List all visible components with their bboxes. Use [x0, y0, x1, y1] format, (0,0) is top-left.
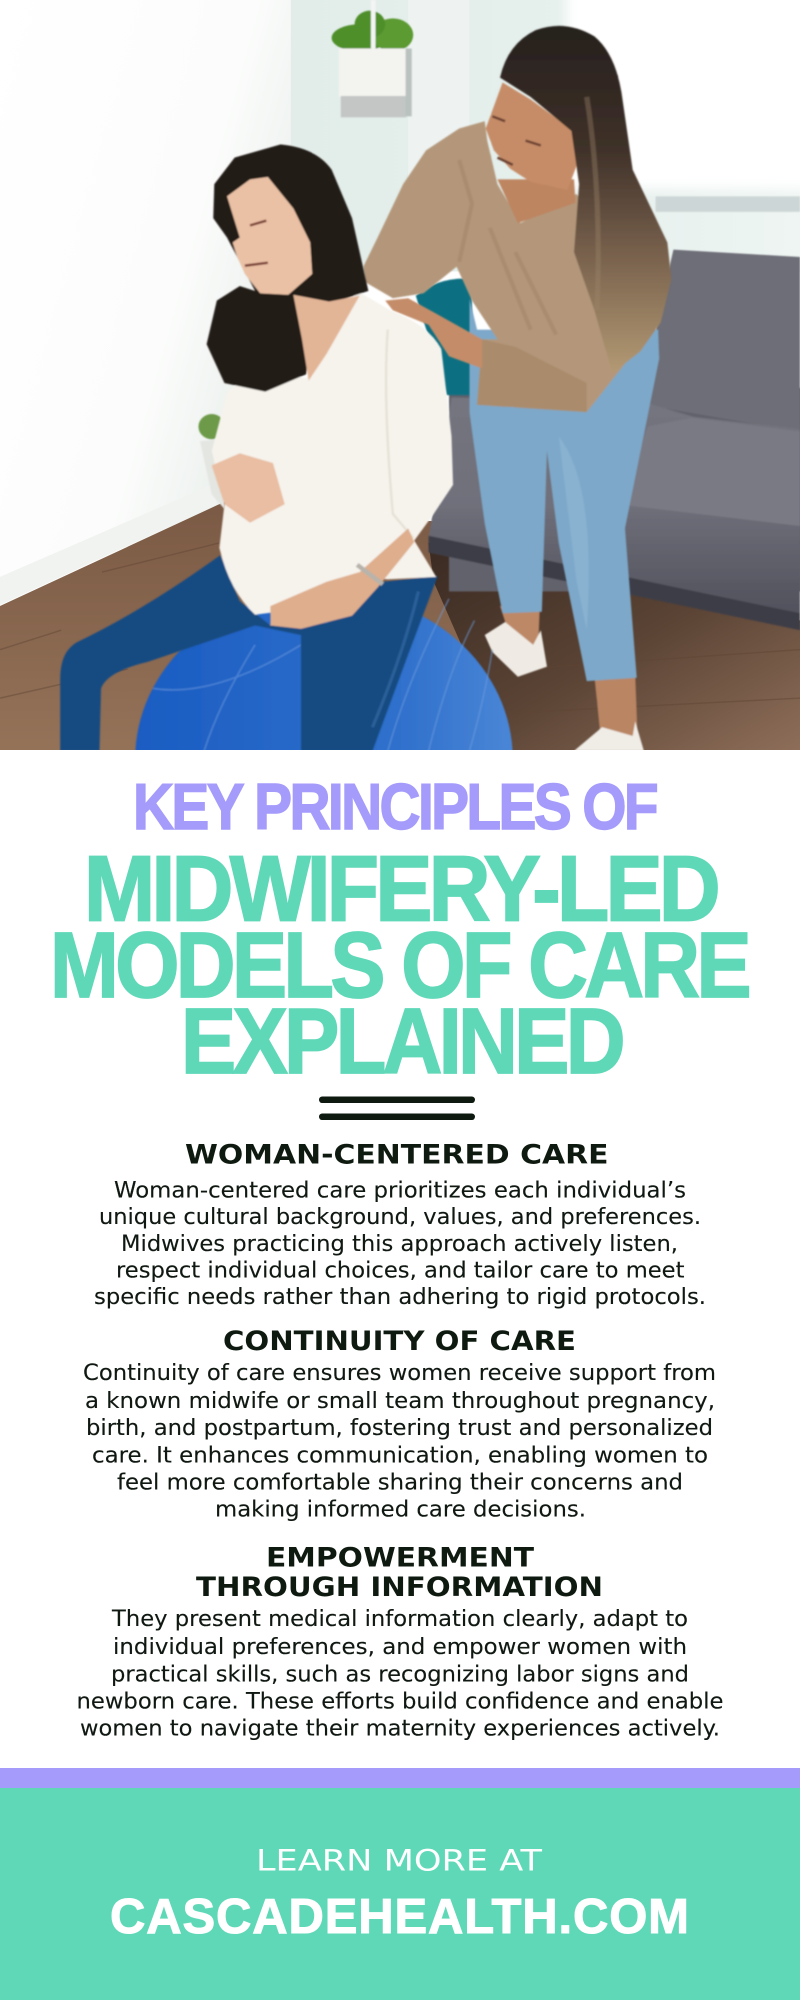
- section: woman-centered care: [94, 1140, 706, 1310]
- woman forearm and lower hand: [270, 528, 414, 629]
- heading: continuity of care: CONTINUITY OF CARE: [223, 1326, 576, 1357]
- body text: empowerment through information: [76, 1607, 724, 1742]
- woman sweater: [212, 291, 453, 615]
- midwife: [363, 26, 671, 751]
- body text: continuity of care: feel more comfortable sharing their concerns and: [117, 1470, 683, 1496]
- body text: woman-centered care: specific needs rather than adhering to rigid protocols.: [94, 1285, 706, 1310]
- sofa: [429, 250, 800, 630]
- body text: continuity of care: birth, and postpartum, fostering trust and personalized: [86, 1416, 713, 1441]
- body text: woman-centered care: respect individual choices, and tailor care to meet: [116, 1259, 685, 1284]
- body text: continuity of care: care. It enhances communication, enabling women to: [92, 1444, 708, 1468]
- woman hair: [207, 144, 368, 392]
- body text: woman-centered care: [94, 1179, 706, 1310]
- body text: continuity of care: making informed care decisions.: [215, 1498, 586, 1522]
- footer: cascadehealth.com: CASCADEHEALTH.COM: [110, 1890, 689, 1944]
- woman upper hand: [212, 453, 285, 523]
- heading: woman-centered care: WOMAN-CENTERED CARE: [185, 1140, 608, 1170]
- teal pillow: [416, 278, 472, 395]
- body text: empowerment through information: They present medical information clearly, adapt to: [111, 1607, 688, 1632]
- woman face: [227, 177, 312, 295]
- woman jeans: [60, 555, 438, 751]
- exercise ball: [134, 598, 514, 750]
- heading: empowerment through information: THROUGH INFORMATION: [196, 1572, 603, 1603]
- hero photo: midwife supporting pregnant woman on exercise ball: [0, 0, 800, 750]
- body text: woman-centered care: Midwives practicing this approach actively listen,: [121, 1232, 678, 1257]
- woman neck: [293, 295, 360, 381]
- footer panel: [0, 1788, 800, 2000]
- midwife hair: [500, 26, 671, 373]
- heading: empowerment through information: [196, 1542, 603, 1603]
- body text: continuity of care: [83, 1361, 716, 1522]
- body text: empowerment through information: practical skills, such as recognizing labor signs and: [111, 1662, 689, 1688]
- body text: empowerment through information: newborn care. These efforts build confidence and enable: [76, 1690, 724, 1714]
- pregnant woman: [60, 144, 453, 751]
- midwife hand: [385, 298, 482, 368]
- woman bracelet: [357, 565, 383, 584]
- body text: continuity of care: Continuity of care ensures women receive support from: [83, 1361, 716, 1386]
- title line: midwifery-led: MIDWIFERY-LED: [84, 836, 718, 940]
- body text: woman-centered care: Woman-centered care prioritizes each individual’s: [114, 1179, 686, 1204]
- body text: woman-centered care: unique cultural background, values, and preferences.: [99, 1205, 701, 1230]
- title line: explained: EXPLAINED: [181, 989, 623, 1093]
- title: [50, 770, 749, 1093]
- divider: double bars: [319, 1096, 475, 1120]
- midwife legs: [500, 606, 540, 647]
- midwife sweater: [363, 120, 625, 412]
- midwife neck and face: [497, 179, 576, 223]
- title line: key principles of: KEY PRINCIPLES OF: [133, 770, 657, 843]
- purple accent band: [0, 1768, 800, 1788]
- midwife jeans: [469, 298, 659, 681]
- room background: [0, 0, 800, 756]
- section: continuity of care: [83, 1326, 716, 1522]
- section: empowerment through information: [76, 1542, 724, 1742]
- body text: continuity of care: a known midwife or small team throughout pregnancy,: [85, 1389, 715, 1414]
- floor plant: [198, 414, 225, 509]
- hanging plant: [332, 0, 413, 117]
- midwife shoes: [485, 622, 547, 677]
- heading: empowerment through information: EMPOWERMENT: [266, 1542, 535, 1574]
- body text: empowerment through information: individual preferences, and empower women with: [113, 1635, 687, 1660]
- body text: empowerment through information: women to navigate their maternity experiences actively.: [80, 1716, 720, 1742]
- footer: learn more at: LEARN MORE AT: [256, 1844, 543, 1878]
